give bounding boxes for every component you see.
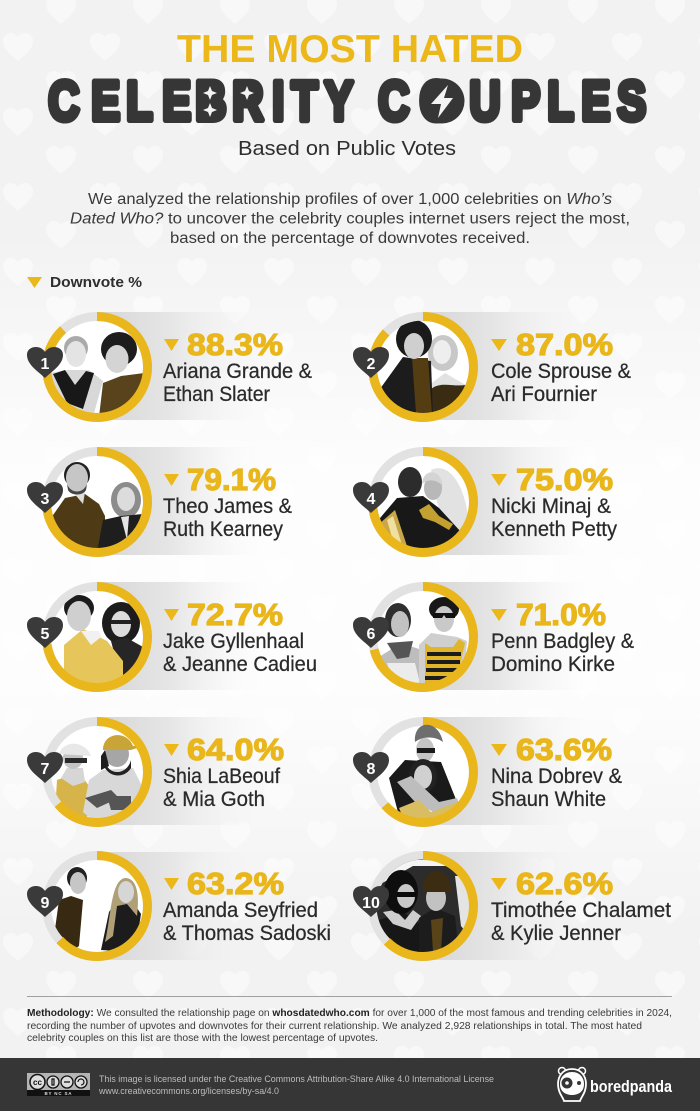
couple 4: Nicki Minaj & Kenneth Petty: Nicki Minaj & — [491, 495, 611, 518]
couple 7: Shia LaBeouf & Mia Goth — [27, 717, 284, 825]
couple 7: Shia LaBeouf & Mia Goth: Shia LaBeouf — [163, 765, 280, 788]
couple 5: Jake Gyllenhaal & Jeanne Cadieu: 72.7% — [187, 597, 283, 632]
license text: www.creativecommons.org/licenses/by-sa/4.0 — [98, 1086, 279, 1097]
couple 9: Amanda Seyfried & Thomas Sadoski: 9 — [41, 895, 50, 912]
license text: This image is licensed under the Creative Commons Attribution-Share Alike 4.0 International License — [99, 1074, 494, 1085]
couple 8: Nina Dobrev & Shaun White: Nina Dobrev & — [491, 765, 622, 788]
couple 3: Theo James & Ruth Kearney: Theo James & — [163, 495, 292, 518]
intro text — [70, 191, 630, 247]
icon: creative commons badge: BY NC SA — [44, 1091, 72, 1096]
couple 6: Penn Badgley & Domino Kirke — [353, 582, 634, 690]
couple 3: Theo James & Ruth Kearney: Ruth Kearney — [163, 518, 283, 541]
intro text: We analyzed the relationship profiles of over 1,000 celebrities on Who’s — [88, 191, 612, 208]
title line: celebrity couples: CELEBRITY — [48, 70, 353, 132]
icon: creative commons badge — [27, 1073, 90, 1096]
license text — [98, 1074, 494, 1097]
methodology: recording the number of upvotes and downvotes for their current relationship. We analyzed 2,928 relationships in total. The most hated — [27, 1020, 642, 1032]
couple 7: Shia LaBeouf & Mia Goth: 7 — [41, 761, 50, 778]
icon: creative commons badge: cc — [33, 1078, 42, 1087]
title line: the most hated: THE MOST HATED — [177, 28, 523, 71]
couple 5: Jake Gyllenhaal & Jeanne Cadieu — [27, 582, 317, 690]
couple 5: Jake Gyllenhaal & Jeanne Cadieu: Jake Gyllenhaal — [163, 630, 304, 653]
couple 3: Theo James & Ruth Kearney — [27, 447, 292, 555]
couple 6: Penn Badgley & Domino Kirke: Domino Kirke — [491, 653, 615, 676]
couple 8: Nina Dobrev & Shaun White: Shaun White — [491, 788, 606, 811]
title — [48, 28, 646, 132]
logo: boredpanda: boredpanda — [590, 1077, 672, 1096]
couple 8: Nina Dobrev & Shaun White: 63.6% — [516, 732, 612, 767]
couple 2: Cole Sprouse & Ari Fournier: 87.0% — [516, 327, 613, 362]
couple 7: Shia LaBeouf & Mia Goth: 64.0% — [187, 732, 284, 767]
couple 6: Penn Badgley & Domino Kirke: Penn Badgley & — [491, 630, 634, 653]
couple 8: Nina Dobrev & Shaun White: 8 — [367, 761, 376, 778]
couple 6: Penn Badgley & Domino Kirke: 6 — [367, 626, 376, 643]
couple 10: Timothée Chalamet & Kylie Jenner: 62.6% — [516, 866, 613, 901]
couple 10: Timothée Chalamet & Kylie Jenner — [353, 852, 671, 960]
couple 1: Ariana Grande & Ethan Slater: Ethan Slater — [163, 383, 270, 406]
couple 2: Cole Sprouse & Ari Fournier: 2 — [367, 356, 376, 373]
couple 7: Shia LaBeouf & Mia Goth: & Mia Goth — [163, 788, 265, 811]
couple 2: Cole Sprouse & Ari Fournier: Cole Sprouse & — [491, 360, 631, 383]
couple 10: Timothée Chalamet & Kylie Jenner: & Kylie Jenner — [491, 922, 621, 945]
couple 6: Penn Badgley & Domino Kirke: 71.0% — [516, 597, 606, 632]
couple 1: Ariana Grande & Ethan Slater: 1 — [41, 356, 50, 373]
couple 8: Nina Dobrev & Shaun White — [353, 717, 622, 825]
couple 5: Jake Gyllenhaal & Jeanne Cadieu: 5 — [41, 626, 50, 643]
couple 9: Amanda Seyfried & Thomas Sadoski: Amanda Seyfried — [163, 899, 318, 922]
couple 5: Jake Gyllenhaal & Jeanne Cadieu: & Jeanne Cadieu — [163, 653, 317, 676]
intro text: Dated Who? to uncover the celebrity couples internet users reject the most, — [70, 210, 630, 228]
couple 3: Theo James & Ruth Kearney: 79.1% — [187, 462, 276, 497]
couple 4: Nicki Minaj & Kenneth Petty: 75.0% — [516, 462, 613, 497]
title line: celebrity couples — [48, 70, 646, 132]
methodology: Methodology: We consulted the relationship page on whosdatedwho.com for over 1,000 of the most famous and trending celebrities in 2024, — [27, 1007, 672, 1019]
couple 1: Ariana Grande & Ethan Slater: 88.3% — [187, 327, 283, 362]
footer — [0, 1058, 700, 1111]
couple 1: Ariana Grande & Ethan Slater: Ariana Grande & — [163, 360, 312, 383]
couple 9: Amanda Seyfried & Thomas Sadoski: 63.2% — [187, 866, 284, 901]
couple 2: Cole Sprouse & Ari Fournier: Ari Fournier — [491, 383, 597, 406]
subtitle: Based on Public Votes — [238, 138, 456, 160]
couple 9: Amanda Seyfried & Thomas Sadoski — [27, 852, 331, 960]
couple 3: Theo James & Ruth Kearney: 3 — [41, 491, 50, 508]
couple 10: Timothée Chalamet & Kylie Jenner: Timothée Chalamet — [491, 899, 671, 922]
intro text: based on the percentage of downvotes received. — [170, 230, 530, 247]
couple 4: Nicki Minaj & Kenneth Petty: Kenneth Petty — [491, 518, 617, 541]
couple 4: Nicki Minaj & Kenneth Petty — [353, 447, 617, 555]
methodology: celebrity couples on this list are those with the lowest percentage of upvotes. — [27, 1032, 378, 1044]
logo: boredpanda — [558, 1068, 672, 1101]
couple 9: Amanda Seyfried & Thomas Sadoski: & Thomas Sadoski — [163, 922, 331, 945]
couple 4: Nicki Minaj & Kenneth Petty: 4 — [367, 491, 376, 508]
methodology — [27, 1007, 672, 1044]
couple 1: Ariana Grande & Ethan Slater — [27, 312, 312, 420]
legend: downvote %: Downvote % — [50, 275, 142, 291]
couple 2: Cole Sprouse & Ari Fournier — [353, 312, 631, 420]
couple 10: Timothée Chalamet & Kylie Jenner: 10 — [362, 895, 380, 912]
title line: celebrity couples: COUPLES — [378, 70, 646, 132]
